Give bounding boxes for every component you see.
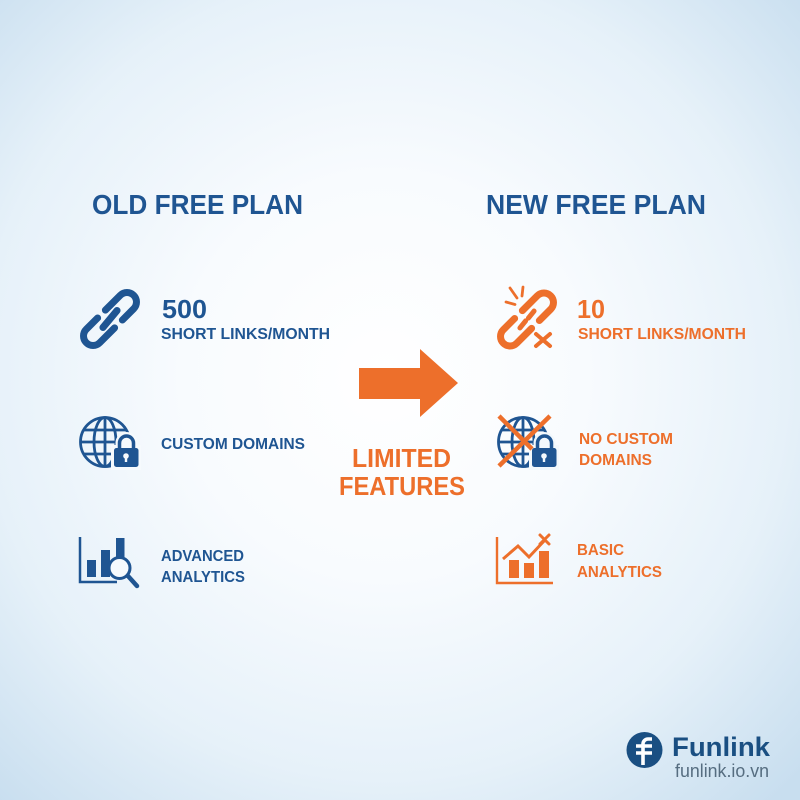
icon: crossed-out globe with lock	[498, 416, 559, 470]
text: basic analytics: ANALYTICS	[577, 564, 662, 581]
text: no custom domains: NO CUSTOM	[579, 431, 673, 448]
brand url: funlink.io.vn	[675, 761, 769, 781]
label: limited features: LIMITED	[352, 443, 451, 473]
icon: bar chart with magnifier	[80, 537, 137, 586]
label: limited features: FEATURES	[339, 471, 465, 501]
text: advanced analytics	[161, 548, 245, 586]
text: 500 short links per month	[161, 294, 330, 343]
text: advanced analytics: ADVANCED	[161, 548, 244, 565]
icon: broken chain link	[497, 287, 557, 350]
text: no custom domains: DOMAINS	[579, 452, 652, 469]
text: 500 short links per month: SHORT LINKS/MONTH	[161, 326, 330, 343]
icon: chain link	[80, 289, 140, 349]
text: custom domains: CUSTOM DOMAINS	[161, 436, 305, 453]
brand logo	[626, 732, 771, 781]
panel: old free plan	[80, 189, 330, 586]
heading: old free plan: OLD FREE PLAN	[92, 189, 303, 220]
label: limited features	[339, 443, 465, 501]
text: no custom domains	[579, 431, 673, 469]
text: 10 short links per month: SHORT LINKS/MONTH	[578, 326, 746, 343]
icon: basic chart	[497, 535, 553, 583]
text: basic analytics: BASIC	[577, 542, 624, 559]
text: advanced analytics: ANALYTICS	[161, 569, 245, 586]
arrow	[359, 349, 458, 417]
brand name: Funlink	[672, 732, 771, 762]
icon: funlink logo mark	[626, 732, 662, 768]
text: 10 short links per month	[577, 294, 746, 343]
text: 10 short links per month: 10	[577, 294, 605, 324]
heading: new free plan: NEW FREE PLAN	[486, 189, 706, 220]
panel: new free plan	[486, 189, 746, 583]
icon: globe with lock	[80, 418, 141, 470]
text: 500 short links per month: 500	[162, 294, 207, 324]
text: basic analytics	[577, 542, 662, 581]
